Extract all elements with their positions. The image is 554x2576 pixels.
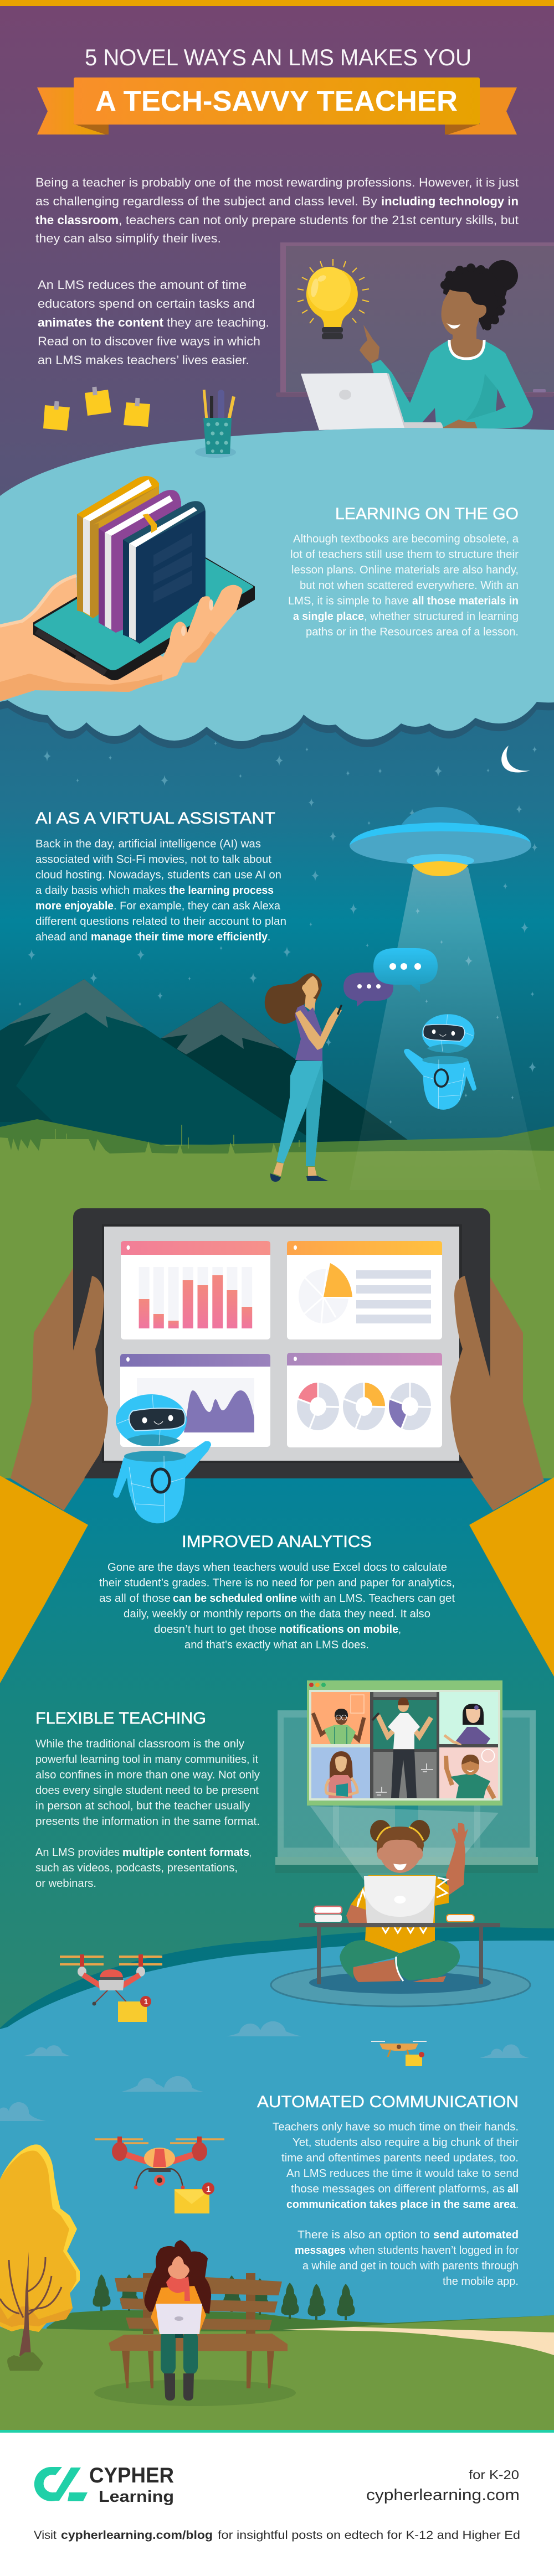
- book: yellow: [77, 476, 159, 618]
- body: in person at school, but the teacher usually: [35, 1800, 250, 1812]
- body: those messages on different platforms, as: [291, 2183, 505, 2195]
- tile: girl with book: [311, 1747, 370, 1798]
- robot pointing at tablet: [113, 1394, 211, 1523]
- body: . For example, they can ask Alexa: [114, 900, 281, 912]
- icon: UFO: [350, 807, 531, 876]
- speech bubble: blue: [373, 948, 438, 992]
- body: or webinars.: [35, 1877, 96, 1890]
- arm and phone: [295, 1007, 342, 1050]
- card: area chart: [120, 1354, 270, 1447]
- projector stand: [395, 1806, 418, 1839]
- top accent bar: [0, 0, 554, 6]
- body: .: [516, 2199, 519, 2211]
- body: associated with Sci-Fi movies, not to talk about: [35, 854, 271, 866]
- body: does every single student need to be present: [35, 1784, 259, 1797]
- body: such as videos, podcasts, presentations,: [35, 1862, 238, 1874]
- footer website: cypherlearning.com: [366, 2486, 520, 2504]
- panel: learning on the go (table top): [0, 428, 554, 741]
- stars: [18, 741, 538, 1124]
- face: [302, 976, 319, 998]
- tile: boy with glasses: [311, 1692, 370, 1744]
- fingers: [162, 585, 243, 681]
- mountains: [0, 979, 408, 1146]
- heading: AI AS A VIRTUAL ASSISTANT: [35, 809, 275, 827]
- logo mark: [34, 2467, 88, 2501]
- body: a while and get in touch with parents through: [302, 2260, 519, 2272]
- body: the mobile app.: [443, 2275, 519, 2288]
- light beam: [310, 1806, 499, 1880]
- body: send automated: [433, 2229, 519, 2241]
- pointing hand: [360, 325, 379, 364]
- body: lot of teachers still use them to structure their: [290, 549, 519, 561]
- section text: learning on the go: [288, 505, 519, 638]
- autumn tree: [0, 2144, 80, 2371]
- UFO beam: [350, 867, 541, 1190]
- background: green meadow: [0, 1140, 554, 1483]
- robot in beam: [404, 1014, 476, 1110]
- footpath: [283, 2327, 554, 2355]
- body: the learning process: [169, 884, 274, 897]
- hair: [440, 260, 518, 330]
- body: An LMS reduces the time it would take to send: [286, 2168, 519, 2180]
- rug: [271, 1963, 530, 2006]
- torso: [410, 340, 533, 432]
- body: doesn’t hurt to get those: [154, 1623, 276, 1636]
- ribbon banner: A TECH-SAVVY TEACHER: [95, 85, 458, 117]
- section text: automated communication: [257, 2093, 519, 2288]
- foreground lawn: [0, 2315, 554, 2430]
- body: Gone are the days when teachers would use Excel docs to calculate: [107, 1561, 447, 1574]
- pencil cup: [195, 390, 236, 458]
- leggings: [161, 2330, 176, 2375]
- speech bubble: purple: [343, 973, 393, 1007]
- body: as all of those: [99, 1592, 171, 1605]
- video conference window: [307, 1680, 502, 1806]
- desk: [299, 1923, 500, 1927]
- footer accent line: [0, 2430, 554, 2433]
- body: their student’s grades. There is no need for pen and paper for analytics,: [99, 1577, 455, 1589]
- title: [37, 44, 517, 135]
- tablet: [73, 1208, 490, 1478]
- section text: flexible teaching: [35, 1709, 260, 1890]
- blackboard: [276, 242, 554, 397]
- background: night sky: [0, 692, 554, 1151]
- footer call to action: [34, 2529, 520, 2542]
- body: can be scheduled online: [173, 1592, 297, 1605]
- phone: [34, 540, 254, 680]
- footer background: [0, 2433, 554, 2576]
- neck: [449, 327, 484, 359]
- body: , whether structured in learning: [364, 611, 519, 623]
- large red drone bottom: [95, 2137, 224, 2213]
- body: While the traditional classroom is the only: [35, 1738, 244, 1750]
- sweater: [151, 2286, 206, 2333]
- icon: lightbulb: [297, 259, 369, 339]
- hand back: [0, 575, 177, 701]
- laptop: [156, 2304, 202, 2334]
- clouds: [0, 2021, 529, 2121]
- intro second paragraph: an LMS makes teachers’ lives easier.: [38, 353, 249, 367]
- body: more enjoyable: [35, 900, 114, 912]
- footer website: [366, 2468, 520, 2504]
- tile: girl with bob: [439, 1692, 498, 1747]
- footer call to action: Visit: [34, 2529, 57, 2542]
- body: presents the information in the same format.: [35, 1815, 260, 1828]
- book: navy: [123, 501, 206, 644]
- body: Although textbooks are becoming obsolete, a: [293, 533, 519, 545]
- footer logo: [34, 2464, 174, 2506]
- footer website: for K-20: [469, 2468, 519, 2482]
- title line one: 5 NOVEL WAYS AN LMS MAKES YOU: [85, 44, 471, 70]
- body: and that’s exactly what an LMS does.: [184, 1639, 369, 1651]
- hair: [144, 2240, 211, 2314]
- logo wordmark: CYPHER: [89, 2464, 174, 2487]
- body: time and oftentimes parents need updates, too.: [281, 2152, 519, 2164]
- card: pie chart: [287, 1241, 442, 1339]
- scarf: [166, 2276, 190, 2301]
- heading: FLEXIBLE TEACHING: [35, 1709, 206, 1727]
- laptop: [364, 1876, 436, 1923]
- panel: table shadow scallops: [0, 504, 554, 749]
- crossed legs: [340, 1940, 400, 1979]
- hands over tablet: [11, 1268, 544, 1511]
- card: donut charts: [287, 1353, 442, 1447]
- neck: [305, 995, 316, 1013]
- intro second paragraph: [38, 278, 269, 367]
- ribbon banner: [37, 77, 517, 135]
- hair buns: [370, 1820, 391, 1843]
- hand holding phone with books: [0, 476, 254, 701]
- body: LMS, it is simple to have: [288, 595, 409, 607]
- classroom window backdrop: [275, 1710, 538, 1873]
- body: multiple content formats: [122, 1846, 249, 1859]
- body: Yet, students also require a big chunk of their: [293, 2137, 519, 2149]
- arm: [371, 360, 435, 422]
- grass hills: [0, 1119, 554, 1168]
- body: [288, 533, 519, 638]
- intro paragraph: Being a teacher is probably one of the most rewarding professions. However, it is just: [35, 175, 519, 189]
- small drone with envelope: [371, 2041, 427, 2066]
- icon: crescent moon: [501, 746, 530, 773]
- body: [35, 1738, 260, 1890]
- body: messages: [295, 2244, 346, 2257]
- large red drone top: [60, 1954, 162, 2022]
- bench shadow: [94, 2380, 296, 2406]
- large red drone bottom: 1: [206, 2185, 211, 2194]
- intro paragraph: they can also simplify their lives.: [35, 231, 221, 245]
- intro second paragraph: educators spend on certain tasks and: [38, 297, 255, 311]
- body: ,: [398, 1623, 401, 1636]
- background: teal section: [0, 1478, 554, 2054]
- hair: [265, 973, 322, 1024]
- face: [441, 289, 486, 336]
- sleeves: [0, 1476, 554, 1683]
- book: purple: [99, 490, 181, 633]
- intro second paragraph: animates the content: [38, 315, 164, 329]
- bench: [109, 2273, 288, 2388]
- body: notifications on mobile: [279, 1623, 398, 1636]
- body: [35, 838, 286, 943]
- body: powerful learning tool in many communities, it: [35, 1753, 258, 1766]
- footer logo: Learning: [99, 2488, 174, 2506]
- section text: AI as a virtual assistant: [35, 809, 286, 943]
- tablet hands behind: [11, 1268, 544, 1511]
- body: Teachers only have so much time on their hands.: [273, 2121, 519, 2133]
- face: [168, 2256, 189, 2281]
- raised arm: [446, 1823, 468, 1895]
- body: when students haven’t logged in for: [348, 2244, 519, 2257]
- body: with an LMS. Teachers can get: [300, 1592, 455, 1605]
- body: a single place: [293, 611, 364, 623]
- tile: teacher at board: [370, 1692, 439, 1798]
- body: a daily basis which makes: [35, 884, 166, 897]
- background: purple header: [0, 0, 554, 498]
- heading: LEARNING ON THE GO: [335, 505, 519, 523]
- body: .: [268, 931, 270, 943]
- body: [273, 2121, 519, 2288]
- teacher illustration: [301, 260, 533, 432]
- body: There is also an option to: [297, 2229, 430, 2241]
- trousers: [276, 1061, 323, 1166]
- intro second paragraph: An LMS reduces the amount of time: [38, 278, 247, 292]
- footer call to action: cypherlearning.com/blog: [61, 2529, 213, 2542]
- body: manage their time more efficiently: [91, 931, 268, 943]
- body: but not when scattered everywhere. With an: [300, 580, 519, 592]
- heading: AUTOMATED COMMUNICATION: [257, 2093, 519, 2111]
- large red drone top: 1: [144, 1997, 148, 2006]
- sticky notes: [43, 387, 150, 431]
- books: [314, 1906, 342, 1913]
- torso: [351, 1875, 449, 1953]
- heading: IMPROVED ANALYTICS: [182, 1533, 372, 1551]
- body: Back in the day, artificial intelligence (AI) was: [35, 838, 261, 850]
- body: all: [507, 2183, 519, 2195]
- body: communication takes place in the same area: [286, 2199, 516, 2211]
- body: daily, weekly or monthly reports on the data they need. It also: [124, 1608, 430, 1620]
- intro second paragraph: Read on to discover five ways in which: [38, 334, 260, 348]
- intro paragraph: the classroom: [35, 213, 119, 227]
- woman with phone: [265, 973, 342, 1182]
- intro paragraph: as challenging regardless of the subject and class level. By: [35, 194, 377, 208]
- section text: improved analytics: [99, 1533, 455, 1651]
- card: bar chart: [121, 1241, 270, 1339]
- intro second paragraph: they are teaching.: [167, 315, 269, 329]
- feet: [413, 1976, 446, 1982]
- body: An LMS provides: [35, 1846, 120, 1859]
- top: [295, 1005, 322, 1061]
- distant hill and trees: [47, 2274, 554, 2341]
- blue hill band: [0, 1927, 554, 2036]
- body: cloud hosting. Nowadays, students can use AI on: [35, 869, 281, 881]
- background: blue sky hill: [0, 1941, 554, 2336]
- ankles and shoes: [273, 1162, 284, 1176]
- body: also confines in more than one way. Not only: [35, 1769, 260, 1781]
- intro paragraph: including technology in: [381, 194, 519, 208]
- body: ,: [249, 1846, 252, 1859]
- head: [377, 1827, 424, 1853]
- body: paths or in the Resources area of a lesson.: [306, 626, 519, 638]
- woman on bench with laptop: [144, 2240, 211, 2401]
- intro paragraph: , teachers can not only prepare students for the 21st century skills, but: [119, 213, 519, 227]
- body: ahead and: [35, 931, 88, 943]
- boots: [164, 2373, 194, 2401]
- laptop: [387, 373, 406, 428]
- tile: boy waving: [439, 1747, 498, 1798]
- body: lesson plans. Online materials are also handy,: [291, 564, 519, 576]
- intro paragraph: [35, 175, 519, 245]
- body: [99, 1561, 455, 1651]
- body: different questions related to their account to plan: [35, 915, 286, 928]
- girl with laptop at desk: [299, 1820, 500, 1984]
- body: all those materials in: [412, 595, 519, 607]
- footer call to action: for insightful posts on edtech for K-12 and Higher Ed: [218, 2529, 520, 2542]
